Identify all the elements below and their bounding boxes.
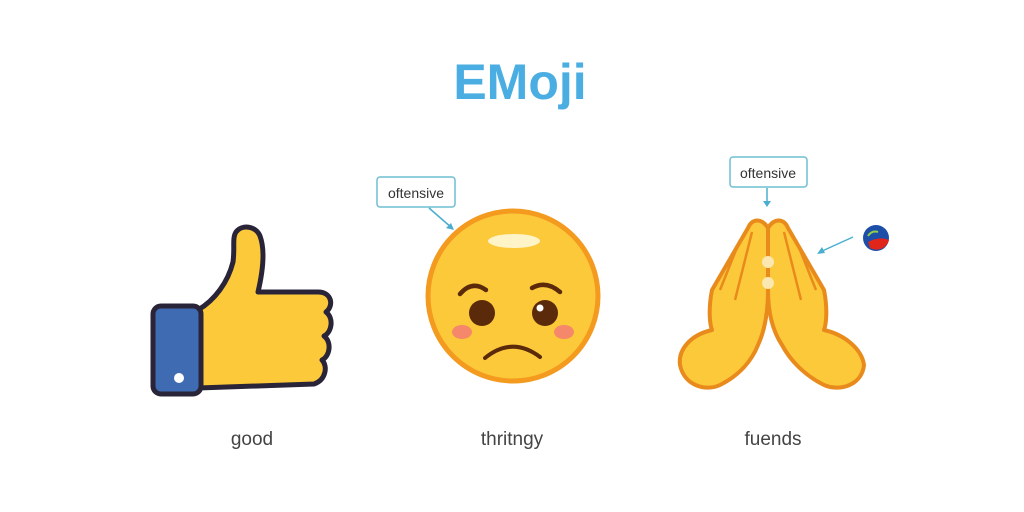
label: good: good: [231, 429, 273, 450]
arrow: flag to hands: [817, 237, 853, 254]
icon: flag badge: [863, 225, 889, 251]
icon: praying hands: [680, 220, 864, 388]
icon: sad face: [428, 211, 598, 381]
callout: offensive 2: oftensive: [740, 165, 796, 181]
label: thritngy: thritngy: [481, 429, 544, 450]
icon: thumbs up: [153, 227, 331, 394]
label: fuends: fuends: [744, 429, 802, 450]
callout: offensive 1: oftensive: [388, 185, 444, 201]
callout: offensive 2: [730, 157, 807, 207]
callout: offensive 1: [377, 177, 455, 230]
title: EMoji: [453, 54, 587, 110]
